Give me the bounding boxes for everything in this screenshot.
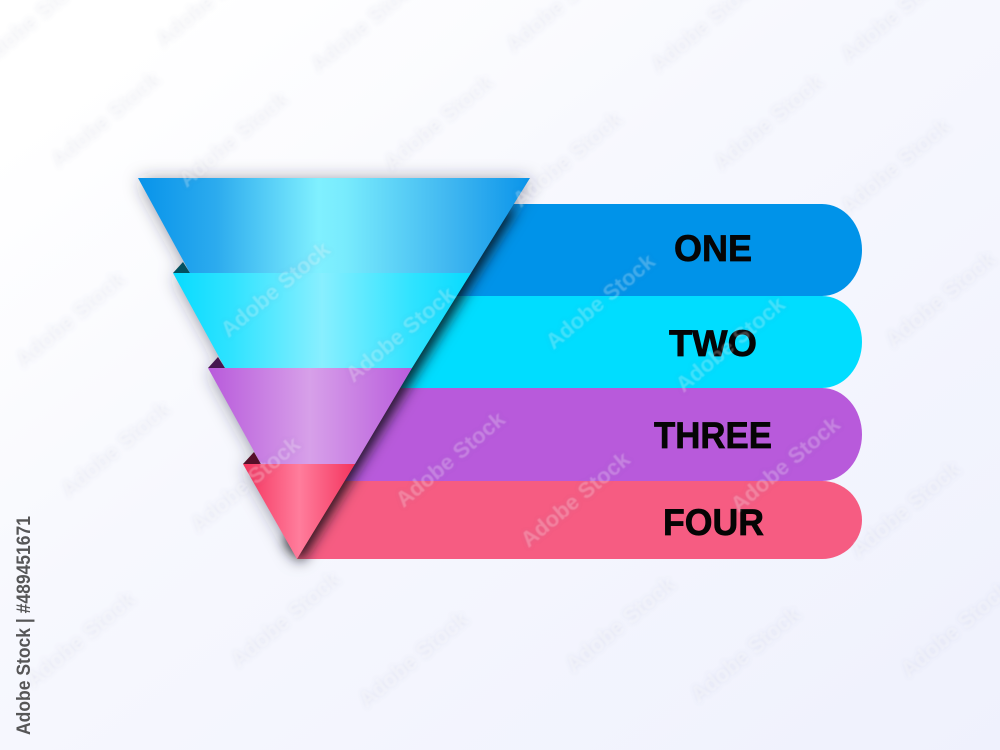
band: four [243,464,355,559]
stock id caption: Adobe Stock | #489451671 [14,516,35,735]
watermark pattern: Adobe Stock [726,411,845,517]
watermark pattern: Adobe Stock [216,236,335,342]
bar: two [300,296,862,388]
watermark pattern: Adobe Stock [46,66,165,172]
label: TWO: TWO [669,323,757,364]
watermark pattern: Adobe Stock [709,69,828,175]
funnel [138,178,530,559]
panel: label bars [297,204,862,559]
watermark pattern: Adobe Stock [56,396,175,502]
bar: one [300,204,862,296]
watermark pattern: Adobe Stock [561,571,680,677]
watermark pattern: Adobe Stock [686,601,805,707]
watermark pattern: Adobe Stock [21,586,140,692]
watermark pattern: Adobe Stock [846,456,965,562]
band: two [173,273,471,368]
watermark pattern: Adobe Stock [881,246,1000,352]
band: one [138,178,530,273]
watermark pattern: Adobe Stock [508,106,627,212]
right edge shadow [284,210,516,562]
bar: four [297,481,862,559]
fold: band three [208,357,225,368]
watermark pattern: Adobe Stock [186,431,305,537]
watermark pattern: Adobe Stock [379,69,498,175]
watermark pattern: Adobe Stock [391,406,510,512]
fold: band two [173,262,190,273]
watermark pattern: Adobe Stock [671,291,790,397]
soft funnel shadow [139,180,531,561]
band: three [208,368,412,464]
watermark pattern: Adobe Stock [174,86,293,192]
fold: band four [243,452,261,464]
watermark pattern: Adobe Stock [226,566,345,672]
watermark pattern: Adobe Stock [541,248,660,354]
label: ONE: ONE [674,228,752,269]
watermark pattern: Adobe Stock [516,446,635,552]
watermark pattern: Adobe Stock [836,113,955,219]
bar: three [300,388,862,481]
label: THREE: THREE [654,415,772,456]
watermark pattern: Adobe Stock [11,266,130,372]
label: FOUR: FOUR [663,502,764,543]
watermark pattern: Adobe Stock [341,281,460,387]
watermark pattern: Adobe Stock [354,606,473,712]
